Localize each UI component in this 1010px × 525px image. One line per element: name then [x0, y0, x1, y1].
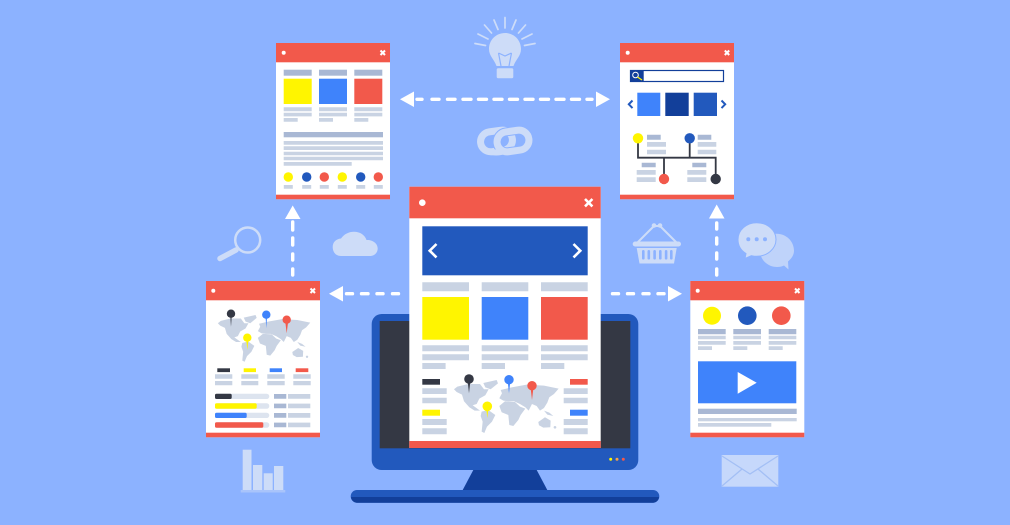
- row of coloured dots: [284, 172, 383, 189]
- world map with pins: [218, 310, 310, 362]
- window footer: [409, 441, 601, 448]
- window header: [409, 187, 601, 218]
- icon: chain link: [479, 129, 530, 153]
- panel: top-left content window: [276, 43, 390, 199]
- icon: light bulb: [475, 18, 535, 78]
- window header: [620, 43, 734, 62]
- icon: bar chart: [241, 450, 285, 492]
- status lights: [609, 458, 625, 461]
- window header: [276, 43, 390, 62]
- hero banner with arrows: [422, 226, 588, 275]
- window footer: [620, 195, 734, 199]
- icon: chat bubbles: [738, 223, 794, 270]
- map legend: [215, 368, 311, 385]
- window header: [206, 281, 320, 300]
- window footer: [690, 433, 804, 437]
- world map with pins: [454, 374, 559, 433]
- window footer: [206, 433, 320, 437]
- panel: main central window: [409, 187, 601, 448]
- left map legend: [422, 379, 447, 434]
- caption lines: [698, 409, 797, 427]
- monitor: [351, 314, 659, 503]
- monitor body: [372, 314, 638, 470]
- carousel: [629, 93, 725, 116]
- video player: [698, 361, 796, 403]
- text block: [284, 132, 383, 166]
- panel: right video window: [690, 281, 804, 437]
- arrow: up to top-right window: [709, 204, 724, 275]
- window header: [690, 281, 804, 300]
- three column cards: [284, 70, 382, 122]
- monitor screen: [380, 321, 630, 448]
- icon: magnifying glass: [220, 228, 260, 258]
- arrow: up to top-left window: [285, 206, 300, 275]
- three profile columns: [698, 306, 796, 350]
- right map legend: [564, 379, 588, 434]
- search bar: [630, 70, 724, 82]
- progress bars: [215, 394, 310, 428]
- monitor stand: [463, 470, 547, 490]
- panel: left map and statistics window: [206, 281, 320, 437]
- icon: cloud: [333, 232, 378, 256]
- icon: envelope: [722, 455, 778, 487]
- icon: shopping basket: [633, 223, 681, 264]
- window footer: [276, 195, 390, 199]
- three column cards: [422, 282, 588, 369]
- monitor base: [351, 490, 659, 503]
- tree diagram: [633, 133, 721, 184]
- panel: top-right search and tree window: [620, 43, 734, 199]
- arrow: left to map window: [329, 286, 398, 302]
- arrow: top double-headed: [400, 92, 610, 107]
- arrow: right to video window: [612, 286, 682, 302]
